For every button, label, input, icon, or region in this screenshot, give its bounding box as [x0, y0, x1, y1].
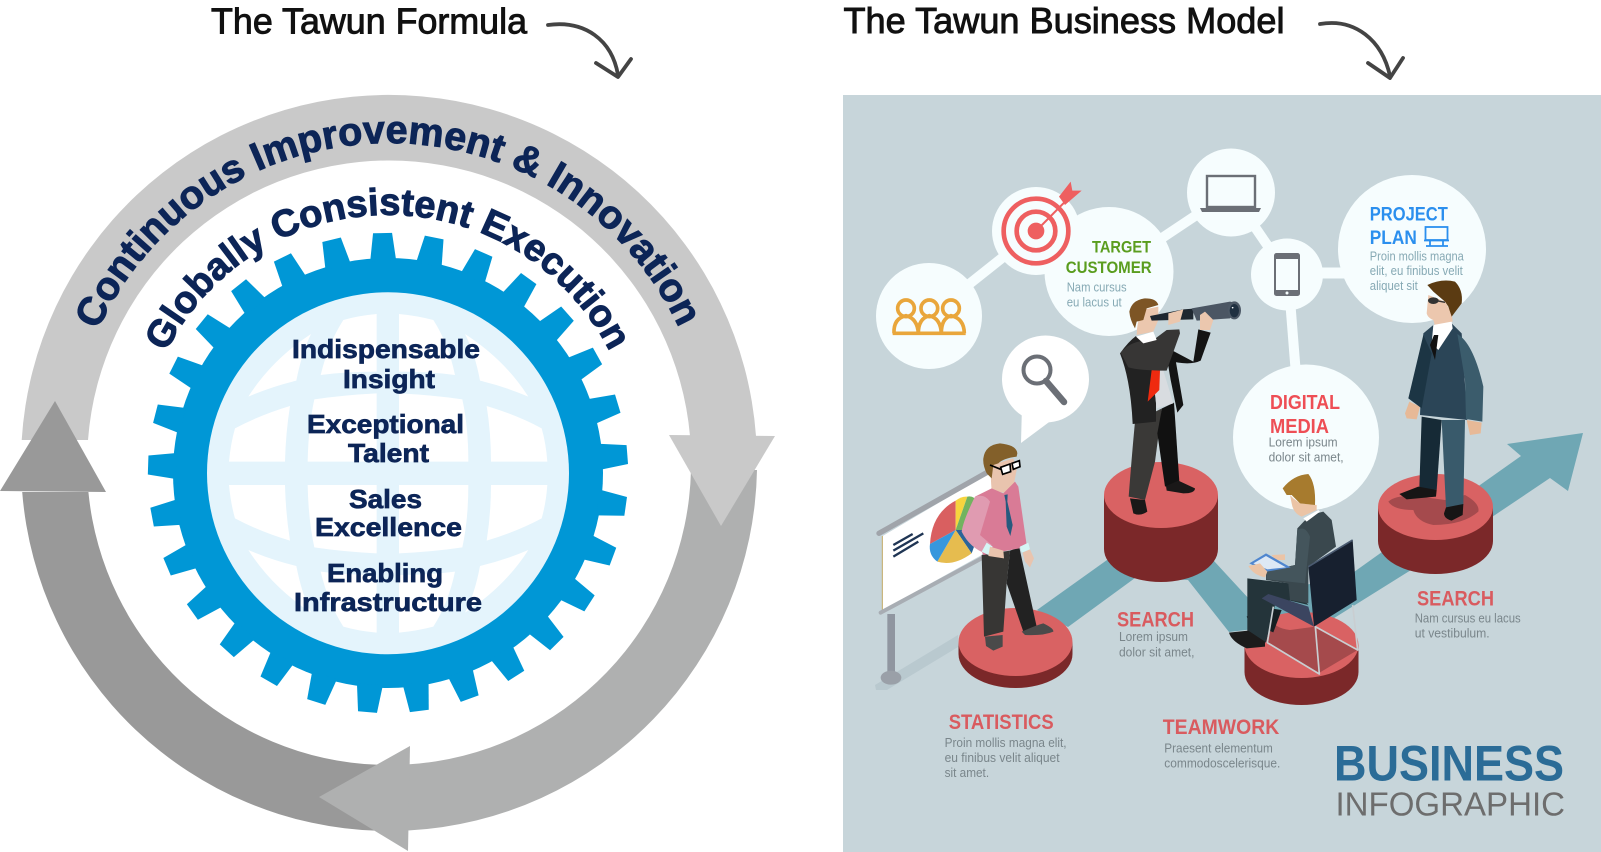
label: teamwork: TEAMWORK [1163, 716, 1279, 739]
label: search right: Nam cursus eu lacus [1415, 611, 1521, 626]
bubble: phone [1251, 238, 1323, 310]
text block: four pillars: Exceptional [307, 409, 464, 439]
panel background [843, 95, 1601, 852]
growth arrow [1037, 433, 1583, 632]
curved label: Continuous Improvement and Innovation: Continuous Improvement & Innovation [77, 121, 696, 326]
pie chart [930, 496, 980, 563]
title: The Tawun Formula: The Tawun Formula [211, 0, 528, 42]
text block: four pillars: Infrastructure [294, 587, 482, 617]
pedestal: search right [1378, 474, 1493, 574]
arc arrow: bottom right segment [408, 470, 757, 830]
text: project plan body [1370, 249, 1464, 293]
curved label: Globally Consistent Execution: Globally Consistent Execution [147, 187, 625, 350]
label: search middle: Lorem ipsum [1119, 629, 1188, 644]
text block: four pillars: Talent [348, 438, 429, 468]
heading: project plan: PROJECT [1370, 204, 1448, 226]
label: statistics: STATISTICS [949, 711, 1054, 734]
bubble: magnifier callout [1002, 336, 1089, 443]
pedestal: teamwork [1244, 612, 1358, 705]
icon: magnifying glass [1024, 356, 1064, 402]
pedestal: search [1104, 462, 1218, 582]
board shadow [875, 635, 958, 690]
heading: project plan: PLAN [1370, 227, 1417, 249]
heading: project plan [1370, 204, 1448, 249]
label: search middle [1117, 609, 1194, 660]
text: target customer body: Nam cursus [1067, 280, 1127, 295]
heading: business infographic [1334, 736, 1565, 824]
label: search middle: SEARCH [1117, 609, 1194, 632]
arc arrow: left dark grey segment with head [0, 401, 378, 831]
bubble: people icon [876, 263, 982, 369]
label: search middle: dolor sit amet, [1119, 645, 1194, 660]
arc arrow: top light grey segment with head [22, 95, 775, 526]
heading: business infographic: BUSINESS [1334, 736, 1564, 792]
bubble: digital media [1233, 364, 1379, 510]
label: search right: ut vestibulum. [1415, 626, 1490, 641]
arrow: formula title pointer [548, 24, 631, 77]
icon: team [893, 300, 966, 333]
label: statistics: eu finibus velit aliquet [945, 750, 1060, 765]
text block: four pillars: Indispensable [292, 334, 480, 364]
text: digital media body: Lorem ipsum [1269, 435, 1338, 450]
text block: four pillars: Enabling [327, 558, 443, 588]
text block: four pillars: Sales [349, 484, 422, 514]
arrow: business model title pointer [1320, 23, 1403, 78]
panel: Tawun formula diagram [0, 94, 775, 851]
label: statistics [945, 711, 1067, 780]
text: target customer body [1067, 280, 1127, 310]
label: teamwork: commodoscelerisque. [1164, 755, 1280, 770]
figure: man in pink shirt [962, 443, 1053, 651]
bubble: laptop [1187, 148, 1275, 236]
text block: four pillars: Excellence [315, 512, 462, 542]
label: teamwork [1163, 716, 1280, 770]
gear [148, 233, 628, 713]
figure: seated man on chair [1229, 474, 1358, 674]
presentation board with pie chart [879, 472, 993, 685]
panel: business infographic [843, 95, 1601, 852]
board text lines [893, 533, 923, 557]
figure: man in blue suit [1388, 281, 1483, 525]
connectors between bubbles [929, 192, 1412, 400]
icon: laptop [1200, 176, 1261, 212]
label: statistics: Proin mollis magna elit, [945, 735, 1067, 750]
label: statistics: sit amet. [945, 765, 989, 780]
heading: business infographic: INFOGRAPHIC [1336, 787, 1565, 824]
text: digital media body [1269, 435, 1344, 465]
heading: digital media: DIGITAL [1270, 392, 1340, 414]
text block: four pillars [292, 334, 482, 617]
bubble: project plan [1338, 175, 1486, 323]
bubble: target customer [992, 182, 1174, 336]
icon: presentation screen [1424, 227, 1449, 246]
icon: target with arrow [1004, 182, 1082, 263]
heading: target customer: TARGET [1092, 238, 1152, 257]
text: project plan body: Proin mollis magna [1370, 249, 1464, 264]
heading: digital media [1270, 392, 1340, 438]
heading: digital media: MEDIA [1270, 416, 1329, 438]
arrow head: bottom segment [319, 746, 410, 851]
icon: phone [1274, 253, 1300, 296]
text: digital media body: dolor sit amet, [1269, 450, 1344, 465]
text: project plan body: aliquet sit [1370, 278, 1418, 293]
label: teamwork: Praesent elementum [1164, 740, 1273, 755]
text block: four pillars: Insight [343, 364, 435, 394]
figure: man with telescope [1120, 298, 1241, 515]
text: target customer body: eu lacus ut [1067, 295, 1122, 310]
label: search right [1415, 588, 1521, 641]
heading: target customer: CUSTOMER [1066, 258, 1152, 277]
title: The Tawun Business Model: The Tawun Business Model [844, 0, 1284, 41]
pedestal: statistics [958, 608, 1072, 688]
heading: target customer [1066, 238, 1152, 277]
label: search right: SEARCH [1417, 588, 1494, 611]
globe [207, 292, 569, 654]
text: project plan body: elit, eu finibus velit [1370, 263, 1463, 278]
